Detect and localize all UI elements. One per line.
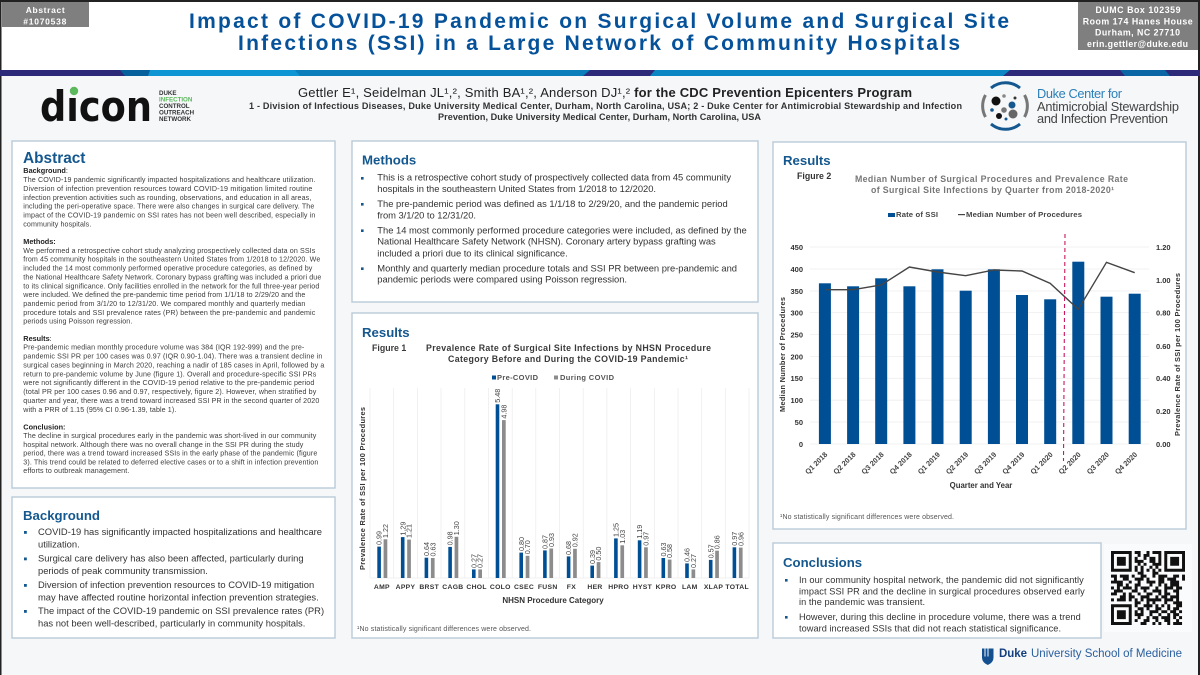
logo: dicon: OUTREACH [159,110,195,116]
combo chart: procedures and SSI rate by quarter: 50 [795,418,803,427]
bar chart: SSI prevalence by procedure category: HPRO [608,584,629,591]
contact tag: erin.gettler@duke.edu [1087,39,1188,49]
bar chart: SSI prevalence by procedure category: 0.80 [517,537,526,551]
panel: results figure 2 [773,142,1186,529]
legend: Rate of SSI [896,210,938,219]
text block: abstract background: community hospitals. [23,220,91,228]
text block: abstract background: including the peri-operative space. There were also changes in surgical care delivery. The [23,203,314,211]
bullet list: conclusions: in the pandemic was transient. [799,597,925,607]
combo chart: procedures and SSI rate by quarter: 100 [790,396,803,405]
bar chart: SSI prevalence by procedure category: COLO [490,584,511,591]
panel: results figure 1 [352,313,758,638]
logo: Duke University School of Medicine: University School of Medicine [1031,648,1182,660]
contact tag: Durham, NC 27710 [1095,28,1180,38]
bullet list: methods: This is a retrospective cohort study of prospectively collected data from 45 community [377,172,731,183]
text block: abstract results: (total PR per 100 cases 0.96 and 0.97, respectively, figure 2). However, when stratified by [23,388,317,396]
bar chart: SSI prevalence by procedure category: HYST [633,584,653,591]
legend: Median Number of Procedures [966,210,1082,219]
combo chart: procedures and SSI rate by quarter: 0.20 [1156,407,1171,416]
combo chart: procedures and SSI rate by quarter: 0.40 [1156,374,1171,383]
author line: Gettler E¹, Seidelman JL¹,², Smith BA¹,², Anderson DJ¹,² for the CDC Prevention Epicenters Program [298,85,912,100]
bullet list: methods: hospitals in the southeastern United States from 1/2018 to 12/2020. [377,183,656,194]
contact tag: Room 174 Hanes House [1083,16,1193,26]
legend [492,373,615,382]
text block: abstract methods: pandemic period from 3/1/20 to 12/31/20. We compared monthly and quarterly median [23,300,305,308]
combo chart: procedures and SSI rate by quarter: Q4 2019 [1000,450,1026,476]
combo chart: procedures and SSI rate by quarter: 150 [790,374,803,383]
title: Infections (SSI) in a Large Network of Community Hospitals [238,32,960,55]
bar chart: SSI prevalence by procedure category: 0.27 [476,554,485,568]
logo: Duke Center for Antimicrobial Stewardship: Antimicrobial Stewardship [1037,99,1179,114]
abstract number tag: #1070538 [23,16,67,26]
text block: abstract conclusion: Conclusion: [23,422,65,431]
text block: abstract methods: procedure totals and SSI prevalence rates (PR) between the pre-pandemic and pandemic [23,309,316,317]
combo chart: procedures and SSI rate by quarter: Prevalence Rate of SSI per 100 Procedures [1173,273,1182,436]
text block: abstract results: return to pre-pandemic volume by June (figure 1). Overall and procedure-specific SSI PRs [23,370,317,378]
bullet list: methods: Monthly and quarterly median procedure totals and SSI PR between pre-pandemic and [377,262,737,273]
figure 1 title: Prevalence Rate of Surgical Site Infections by NHSN Procedure [426,343,711,353]
combo chart: procedures and SSI rate by quarter: Q2 2019 [944,450,970,476]
bullet list: background [24,526,324,628]
bar chart: SSI prevalence by procedure category: HER [587,584,603,591]
figure 1 title [372,343,711,364]
bar chart: SSI prevalence by procedure category: XLAP [704,584,723,591]
text block: abstract methods: included the 14 most commonly performed operative procedure categories, as defined by [23,265,313,273]
bar chart: SSI prevalence by procedure category: NHSN Procedure Category [502,596,604,605]
bar chart: SSI prevalence by procedure category: KPRO [656,584,677,591]
combo chart: procedures and SSI rate by quarter: Q2 2020 [1057,450,1083,476]
logo: Duke Center for Antimicrobial Stewardship: Duke Center for [1037,86,1123,101]
bar chart: SSI prevalence by procedure category: 0.70 [523,540,532,554]
text block: abstract background: infection prevention activities such as rounding, observations, and education in all areas, [23,194,311,202]
bar chart: SSI prevalence by procedure category: 0.68 [564,541,573,555]
header colour band [0,70,1200,76]
panel: conclusions [773,543,1101,638]
legend: During COVID [560,373,615,382]
text block: abstract results: Pre-pandemic median monthly procedure volume was 384 (IQR 192-999) and the pre- [23,344,305,352]
text block: abstract conclusion: The decline in surgical procedures early in the pandemic was short-lived in our community [23,432,317,440]
panel: methods [352,141,758,302]
bar chart: SSI prevalence by procedure category: AMP [374,584,390,591]
bullet list: conclusions: In our community hospital network, the pandemic did not significantly [799,575,1084,585]
bar chart: SSI prevalence by procedure category: 1.29 [398,522,407,536]
combo chart: procedures and SSI rate by quarter: Median Number of Procedures [778,297,787,412]
combo chart: procedures and SSI rate by quarter: Q4 2018 [888,450,914,476]
text block: abstract background [23,166,315,228]
text block: abstract results: surgical cases beginning in March 2020, reaching a nadir of 185 cases in April, followed by a [23,361,324,369]
panel: background [12,497,335,638]
bar chart: SSI prevalence by procedure category: 0.86 [713,535,722,549]
footnote figure 1: ¹No statistically significant differences were observed. [357,626,531,633]
combo chart: procedures and SSI rate by quarter: 1.00 [1156,276,1171,285]
bar chart: SSI prevalence by procedure category: 1.30 [452,521,461,535]
bar chart: SSI prevalence by procedure category: CSEC [514,584,534,591]
text block: abstract methods: the National Healthcare Safety Network. Coronary bypass grafting was included a priori due [23,273,321,281]
bullet list: conclusions: impact SSI PR and the decline in surgical procedures observed early [799,586,1085,596]
text block: abstract methods: We performed a retrospective cohort study analyzing prospectively collected data on SSIs [23,247,316,255]
bar chart: SSI prevalence by procedure category: 0.50 [594,547,603,561]
text block: abstract conclusion: hospital network. Although there was no overall change in the SSI PR during the study [23,441,304,449]
bullet list: conclusions: toward increased SSIs that did not reach statistical significance. [799,624,1061,634]
author line: Prevention, Duke University Medical Center, Durham, North Carolina, USA [438,112,761,122]
combo chart: procedures and SSI rate by quarter: 1.20 [1156,243,1171,252]
abstract number tag: Abstract [26,5,65,15]
bullet list: background: may have affected routine horizontal infection prevention strategies. [38,592,319,602]
combo chart: procedures and SSI rate by quarter: Q3 2018 [859,450,886,476]
bar chart: SSI prevalence by procedure category: 1.19 [635,525,644,539]
text block: abstract background: Diversion of infection prevention resources toward COVID-19 mitigation limited routine [23,185,312,193]
footnote figure 2: ¹No statistically significant differences were observed. [780,514,954,521]
combo chart: procedures and SSI rate by quarter [778,234,1182,490]
logo: Duke Center for Antimicrobial Stewardship [983,83,1179,129]
text block: abstract methods: from 45 community hospitals in the southeastern United States from 1/2018 to 12/2020. We [23,256,320,264]
bullet list: methods: included a priori due to its clinical significance. [377,247,568,258]
combo chart: procedures and SSI rate by quarter: Q4 2020 [1113,450,1139,476]
bar chart: SSI prevalence by procedure category: 0.58 [665,544,674,558]
bar chart: SSI prevalence by procedure category: 0.92 [570,533,580,547]
text block: abstract conclusion [23,422,318,475]
bullet list: background: The impact of the COVID-19 pandemic on SSI prevalence rates (PR) [38,605,324,616]
figure 2 title: of Surgical Site Infections by Quarter from 2018-2020¹ [871,185,1114,195]
bullet list: background: Surgical care delivery has also been affected, particularly during [38,552,304,564]
bar chart: SSI prevalence by procedure category: 0.98 [446,531,455,545]
text block: abstract results: quarter and year, there was a trend toward increased SSI PR in the second quarter of 2020 [23,397,319,405]
legend [888,210,1082,219]
bar chart: SSI prevalence by procedure category: 0.63 [659,542,668,556]
bar chart: SSI prevalence by procedure category: 0.27 [689,554,698,568]
bullet list: methods: pandemic periods were compared using Poisson regression. [377,274,627,285]
bullet list: methods: from 3/1/20 to 12/31/20. [377,209,476,220]
bullet list: conclusions [785,575,1085,634]
combo chart: procedures and SSI rate by quarter: 0 [799,440,803,449]
figure 2 label: Figure 2 [797,171,831,181]
text block: abstract results: with a PRR of 1.15 (95% CI 0.96-1.39, table 1). [22,406,176,414]
text block: abstract results: were not significantly different in the COVID-19 period relative to the pre-pandemic period [22,379,314,387]
bar chart: SSI prevalence by procedure category: 0.63 [428,542,437,556]
bar chart: SSI prevalence by procedure category: 0.96 [736,532,745,546]
bar chart: SSI prevalence by procedure category [358,388,749,605]
logo: dicon: DUKE [159,90,177,97]
combo chart: procedures and SSI rate by quarter: 350 [790,287,803,296]
text block: abstract conclusion: 3). This trend could be related to deferred elective cases or to a shift in infection prevention [23,458,318,466]
bullet list: methods: National Healthcare Safety Network (NHSN). Coronary artery bypass grafting was [377,236,716,247]
bar chart: SSI prevalence by procedure category: Prevalence Rate of SSI per 100 Procedures [358,407,367,570]
bar chart: SSI prevalence by procedure category: LAM [682,584,698,591]
bar chart: SSI prevalence by procedure category: 0.93 [547,533,556,547]
logo: Duke University School of Medicine: Duke [999,648,1027,660]
bar chart: SSI prevalence by procedure category: 0.97 [730,532,739,546]
figure 1 title: Category Before and During the COVID-19 Pandemic¹ [448,354,688,364]
text block: abstract methods: were included. We defined the pre-pandemic time period from 1/1/18 to 2/29/20 and the [22,291,305,299]
bar chart: SSI prevalence by procedure category: 0.57 [706,544,715,558]
bar chart: SSI prevalence by procedure category: CHOL [466,584,487,591]
figure 2 title [855,174,1128,195]
heading: abstract: Abstract [23,150,85,167]
contact tag [1078,2,1198,50]
combo chart: procedures and SSI rate by quarter: Q1 2020 [1028,450,1055,476]
bar chart: SSI prevalence by procedure category: 0.27 [469,554,478,568]
text block: abstract methods [22,237,321,326]
author line [249,85,962,122]
text block: abstract background: Background: [23,166,68,175]
text block: abstract results [22,334,324,414]
bar chart: SSI prevalence by procedure category: 0.87 [540,535,550,549]
heading: background: Background [23,508,100,523]
logo: dicon: NETWORK [159,116,191,123]
combo chart: procedures and SSI rate by quarter: 200 [790,352,803,362]
combo chart: procedures and SSI rate by quarter: Q1 2018 [803,450,829,476]
bar chart: SSI prevalence by procedure category: 0.46 [683,548,692,562]
text block: abstract background: The COVID-19 pandemic significantly impacted hospitalizations and healthcare utilization. [23,176,315,184]
heading: results: Results [783,153,831,168]
bullet list: background: has not been well-described, particularly in community hospitals. [38,618,305,628]
bullet list: conclusions: However, during this decline in procedure volume, there was a trend [799,612,1081,622]
combo chart: procedures and SSI rate by quarter: 250 [790,330,803,340]
combo chart: procedures and SSI rate by quarter: 450 [790,243,803,252]
panel: abstract [12,141,335,488]
legend: Pre-COVID [497,373,539,382]
contact tag: DUMC Box 102359 [1096,5,1181,15]
text block: abstract conclusion: efforts to outbreak management. [23,467,129,475]
bullet list: background: Diversion of infection prevention resources to COVID-19 mitigation [38,579,314,590]
combo chart: procedures and SSI rate by quarter: 0.80 [1156,308,1171,318]
bullet list: background: utilization. [38,538,80,550]
bullet list: background: COVID-19 has significantly impacted hospitalizations and healthcare [38,526,322,537]
logo: Duke Center for Antimicrobial Stewardship: and Infection Prevention [1037,111,1168,126]
title [189,10,1009,55]
bar chart: SSI prevalence by procedure category: 5.48 [493,389,502,403]
figure 2 title: Median Number of Surgical Procedures and Prevalence Rate [855,174,1128,184]
heading: methods: Methods [362,152,416,167]
logo: Duke University School of Medicine [982,648,1182,665]
heading: results: Results [362,325,410,340]
bar chart: SSI prevalence by procedure category: FX [567,584,576,591]
bar chart: SSI prevalence by procedure category: 1.21 [405,524,414,538]
text block: abstract conclusion: period, there was a trend toward increased SSIs in the early phase of the pandemic (figure [23,450,317,458]
text block: abstract methods: to its clinical significance. Only facilities enrolled in the network for the full three-year period [23,282,319,290]
bar chart: SSI prevalence by procedure category: 1.22 [381,524,390,538]
bar chart: SSI prevalence by procedure category: 0.99 [375,531,384,545]
figure 1 title: Figure 1 [372,343,406,353]
logo: dicon: CONTROL [159,103,190,110]
combo chart: procedures and SSI rate by quarter: Q1 2019 [916,450,942,476]
logo: dicon: INFECTION [159,96,193,104]
bar chart: SSI prevalence by procedure category: 0.39 [588,550,597,564]
bullet list: methods [361,172,747,285]
title: Impact of COVID-19 Pandemic on Surgical Volume and Surgical Site [189,10,1009,33]
bar chart: SSI prevalence by procedure category: 4.98 [499,405,508,419]
combo chart: procedures and SSI rate by quarter: Q2 2018 [831,450,858,476]
combo chart: procedures and SSI rate by quarter: 0.60 [1156,342,1171,351]
logo: dicon: dicon [40,82,152,131]
bar chart: SSI prevalence by procedure category: 1.25 [612,523,620,537]
bullet list: methods: The 14 most commonly performed procedure categories were included, as defined by the [377,224,747,235]
abstract number tag [2,2,89,27]
author line: 1 - Division of Infectious Diseases, Duke University Medical Center, Durham, North Carolina, USA; 2 - Duke Center for Antimicrobial Stewardship and Infection [249,101,962,111]
bar chart: SSI prevalence by procedure category: TOTAL [725,584,749,591]
heading: conclusions: Conclusions [783,555,862,570]
combo chart: procedures and SSI rate by quarter: 300 [790,308,803,318]
bullet list: background: periods of peak community transmission. [38,565,208,576]
text block: abstract methods: periods using Poisson regression. [23,318,132,326]
bar chart: SSI prevalence by procedure category: BRST [419,584,440,591]
bar chart: SSI prevalence by procedure category: 0.97 [642,532,650,546]
bar chart: SSI prevalence by procedure category: FUSN [538,584,558,591]
text block: abstract methods: Methods: [23,237,56,246]
bar chart: SSI prevalence by procedure category: APPY [396,584,416,591]
bar chart: SSI prevalence by procedure category: 0.64 [422,542,431,556]
text block: abstract results: Results: [23,334,52,343]
bullet list: methods: The pre-pandemic period was defined as 1/1/18 to 2/29/20, and the pandemic period [377,198,728,209]
QR code [1104,544,1192,632]
bar chart: SSI prevalence by procedure category: CAGB [442,584,464,591]
combo chart: procedures and SSI rate by quarter: Q3 2019 [972,450,998,476]
text block: abstract results: pandemic SSI PR per 100 cases was 0.97 (IQR 0.90-1.04). There was a transient decline in [23,353,322,361]
text block: abstract background: impact of the COVID-19 pandemic on SSI rates has not been well described, especially in [23,212,315,220]
combo chart: procedures and SSI rate by quarter: Quarter and Year [950,481,1012,490]
combo chart: procedures and SSI rate by quarter: Q3 2020 [1085,450,1111,476]
combo chart: procedures and SSI rate by quarter: 0.00 [1156,440,1171,449]
combo chart: procedures and SSI rate by quarter: 400 [790,265,803,274]
bar chart: SSI prevalence by procedure category: 1.03 [618,530,627,544]
